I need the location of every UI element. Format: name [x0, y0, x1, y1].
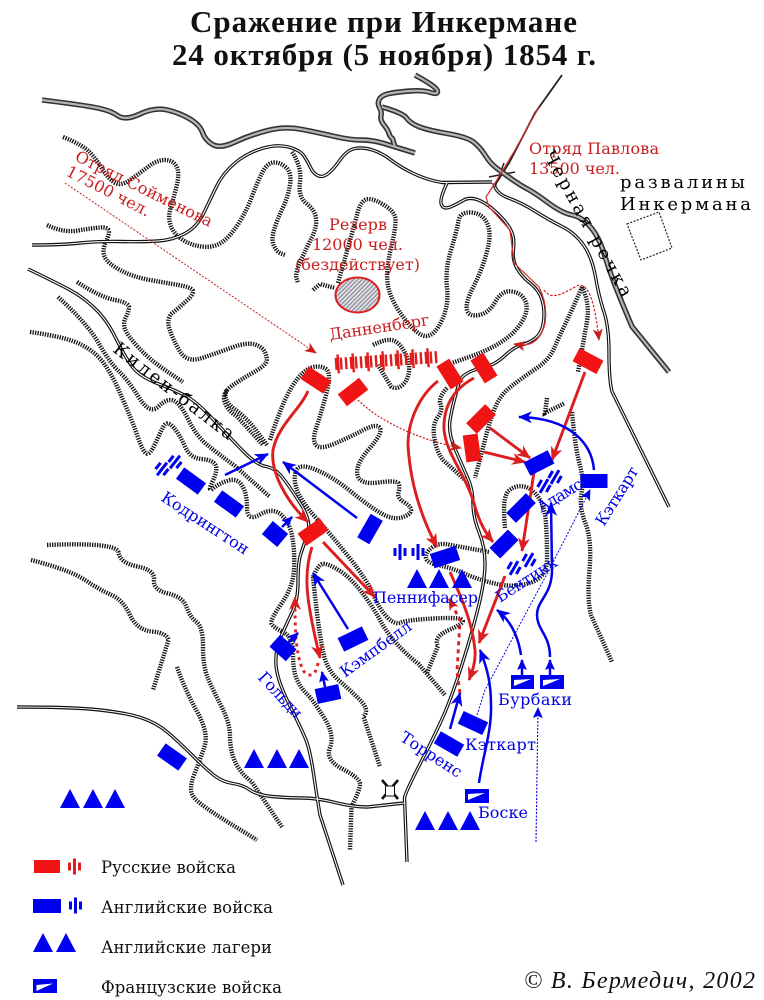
Russian labels: Отряд Сойменова [72, 147, 216, 231]
English and French commander labels: Адамс [533, 474, 586, 516]
Russian movement arrows [65, 107, 599, 693]
Russian labels: Отряд Павлова [529, 139, 659, 158]
legend: French troops: Французские войска [101, 978, 282, 997]
French units [465, 675, 564, 803]
title [172, 4, 596, 72]
terrain labels: развалины [620, 172, 745, 193]
terrain hachures [30, 137, 612, 850]
Russian labels [63, 139, 659, 344]
English and French commander labels: Кэмпбелл [336, 616, 415, 681]
roads [17, 75, 669, 885]
terrain labels [109, 147, 751, 445]
Dannenberg tick line [335, 357, 438, 364]
terrain labels: Инкермана [620, 194, 751, 215]
reserve ellipse [336, 278, 380, 312]
terrain labels: Черная речка [539, 147, 637, 301]
Russian labels: 13500 чел. [529, 159, 620, 178]
legend: English troops [33, 898, 273, 917]
English and French commander labels: Гольди [254, 668, 307, 722]
Inkerman ruins square [627, 212, 672, 260]
Russian labels: (бездействует) [295, 255, 420, 274]
English and French commander labels: Кэткарт [591, 463, 642, 529]
legend: English troops: Английские войска [101, 898, 273, 917]
Russian labels: Данненберг [328, 310, 430, 344]
English and French commander labels: Бурбаки [498, 690, 572, 709]
terrain labels: Килен-балка [109, 338, 239, 445]
title: Сражение при Инкермане [190, 4, 577, 39]
English and French commander labels: Боске [478, 803, 528, 822]
Russian labels: Резерв [329, 215, 387, 234]
English units [157, 450, 608, 771]
English and French commander labels: Кодрингтон [158, 487, 253, 558]
Russian labels: 17500 чел. [63, 162, 154, 220]
English and French commander labels: Торренс [397, 727, 466, 781]
legend: Russian troops [34, 858, 236, 877]
legend: English camps [33, 933, 272, 957]
legend: Russian troops: Русские войска [101, 858, 236, 877]
copyright: © В. Бермедич, 2002 [524, 968, 755, 994]
Russian labels: 12000 чел. [312, 235, 403, 254]
English and French commander labels: Кэткарт [465, 735, 536, 754]
English unit tick symbols [152, 452, 565, 578]
windmill icon [382, 780, 398, 799]
English and French movement arrows [225, 417, 594, 842]
Russian units [298, 348, 603, 546]
English and French commander labels: Пеннифасер [373, 588, 478, 607]
legend [33, 858, 282, 997]
Chernaya river [42, 75, 669, 372]
title: 24 октября (5 ноября) 1854 г. [172, 37, 596, 72]
legend: English camps: Английские лагери [101, 938, 272, 957]
English camp triangles [60, 569, 480, 830]
English and French commander labels: Бентинк [492, 552, 561, 606]
English and French commander labels [158, 463, 642, 822]
